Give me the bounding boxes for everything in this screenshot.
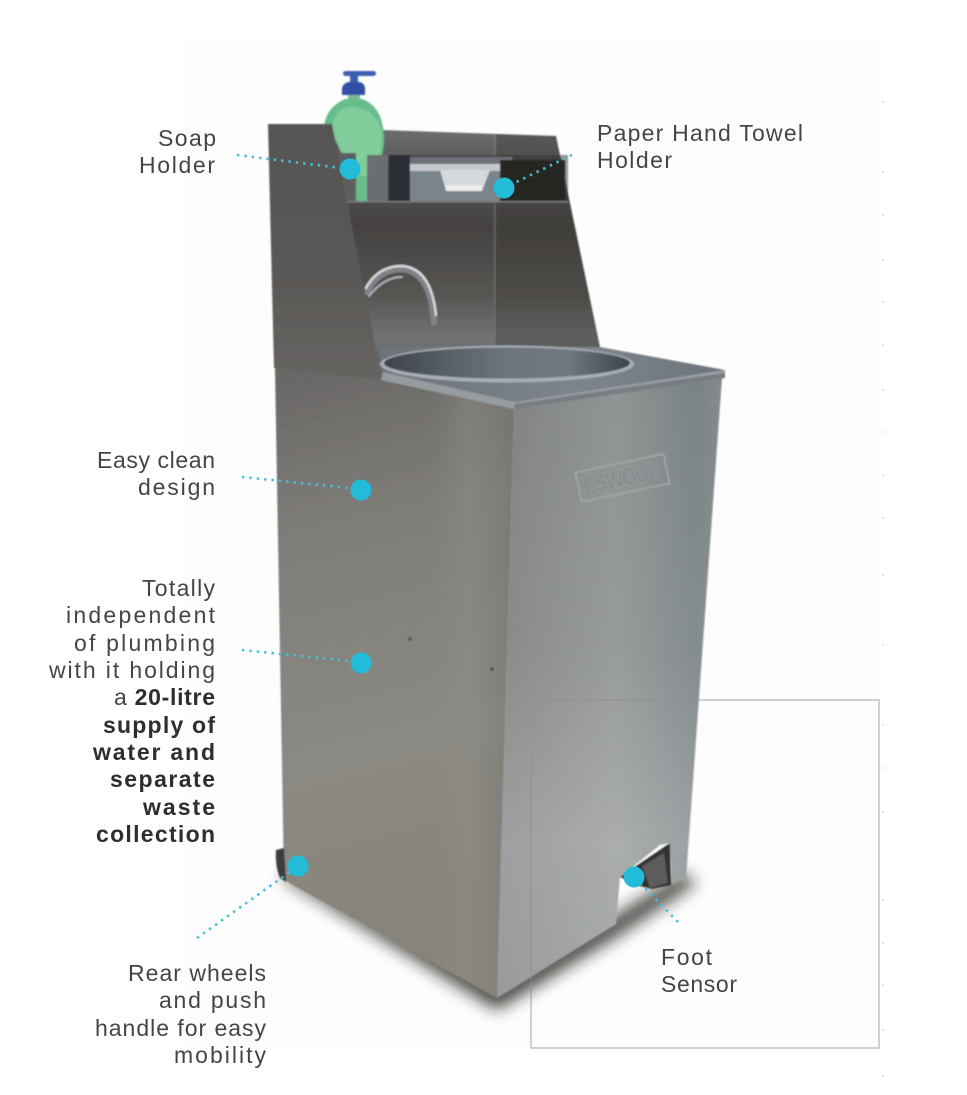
callout: independent of plumbing: supply of bbox=[103, 712, 215, 738]
front body bbox=[275, 368, 514, 998]
callout: easy clean design bbox=[97, 447, 372, 500]
callout: foot sensor: Foot bbox=[661, 944, 713, 970]
callout: independent of plumbing: independent bbox=[66, 602, 216, 628]
callout: foot sensor: Sensor bbox=[661, 971, 737, 997]
callout: foot sensor bbox=[624, 866, 737, 997]
callout: rear wheels: handle for easy bbox=[95, 1015, 266, 1041]
callout: soap holder: Holder bbox=[139, 152, 215, 178]
callout: soap holder: Soap bbox=[158, 125, 216, 151]
callout: independent of plumbing: of plumbing bbox=[74, 630, 215, 656]
callout: easy clean design: design bbox=[138, 474, 215, 500]
callout: easy clean design: Easy clean bbox=[97, 447, 215, 473]
callout: independent of plumbing: water and bbox=[92, 739, 215, 765]
callout: independent of plumbing: with it holding bbox=[48, 657, 215, 683]
product: hand wash station bbox=[268, 71, 725, 1010]
side body bbox=[497, 378, 722, 998]
callout: rear wheels: and push bbox=[159, 987, 266, 1013]
callout: paper hand towel holder: Paper Hand Towel bbox=[597, 120, 803, 146]
background panel bbox=[183, 40, 880, 1050]
callout: independent of plumbing: collection bbox=[96, 821, 215, 847]
left wedge panel bbox=[268, 124, 383, 383]
callout: paper hand towel holder bbox=[494, 120, 803, 198]
callout: independent of plumbing: separate bbox=[110, 766, 215, 792]
foot sensor bbox=[620, 843, 671, 889]
floor shadow bbox=[284, 868, 695, 1010]
callout: independent of plumbing: a 20-litre bbox=[114, 684, 215, 710]
soap bottle bbox=[324, 71, 384, 201]
embossed brand: ESWOOD bbox=[581, 457, 664, 499]
callout: rear wheels bbox=[95, 856, 308, 1068]
callout: independent of plumbing: waste bbox=[142, 794, 215, 820]
callout: rear wheels: Rear wheels bbox=[128, 960, 266, 986]
shelf bbox=[339, 153, 568, 202]
highlight frame around foot sensor bbox=[531, 700, 879, 1048]
tap bbox=[366, 266, 436, 322]
edge dots bbox=[882, 101, 884, 1077]
callout: paper hand towel holder: Holder bbox=[597, 147, 672, 173]
callout: independent of plumbing bbox=[48, 575, 372, 847]
counter bbox=[380, 346, 725, 409]
callout: independent of plumbing: Totally bbox=[142, 575, 216, 601]
screws bbox=[408, 637, 412, 641]
backsplash bbox=[325, 128, 600, 384]
wheel and handle bbox=[276, 848, 286, 882]
callout: rear wheels: mobility bbox=[174, 1042, 266, 1068]
callout: soap holder bbox=[139, 125, 360, 180]
